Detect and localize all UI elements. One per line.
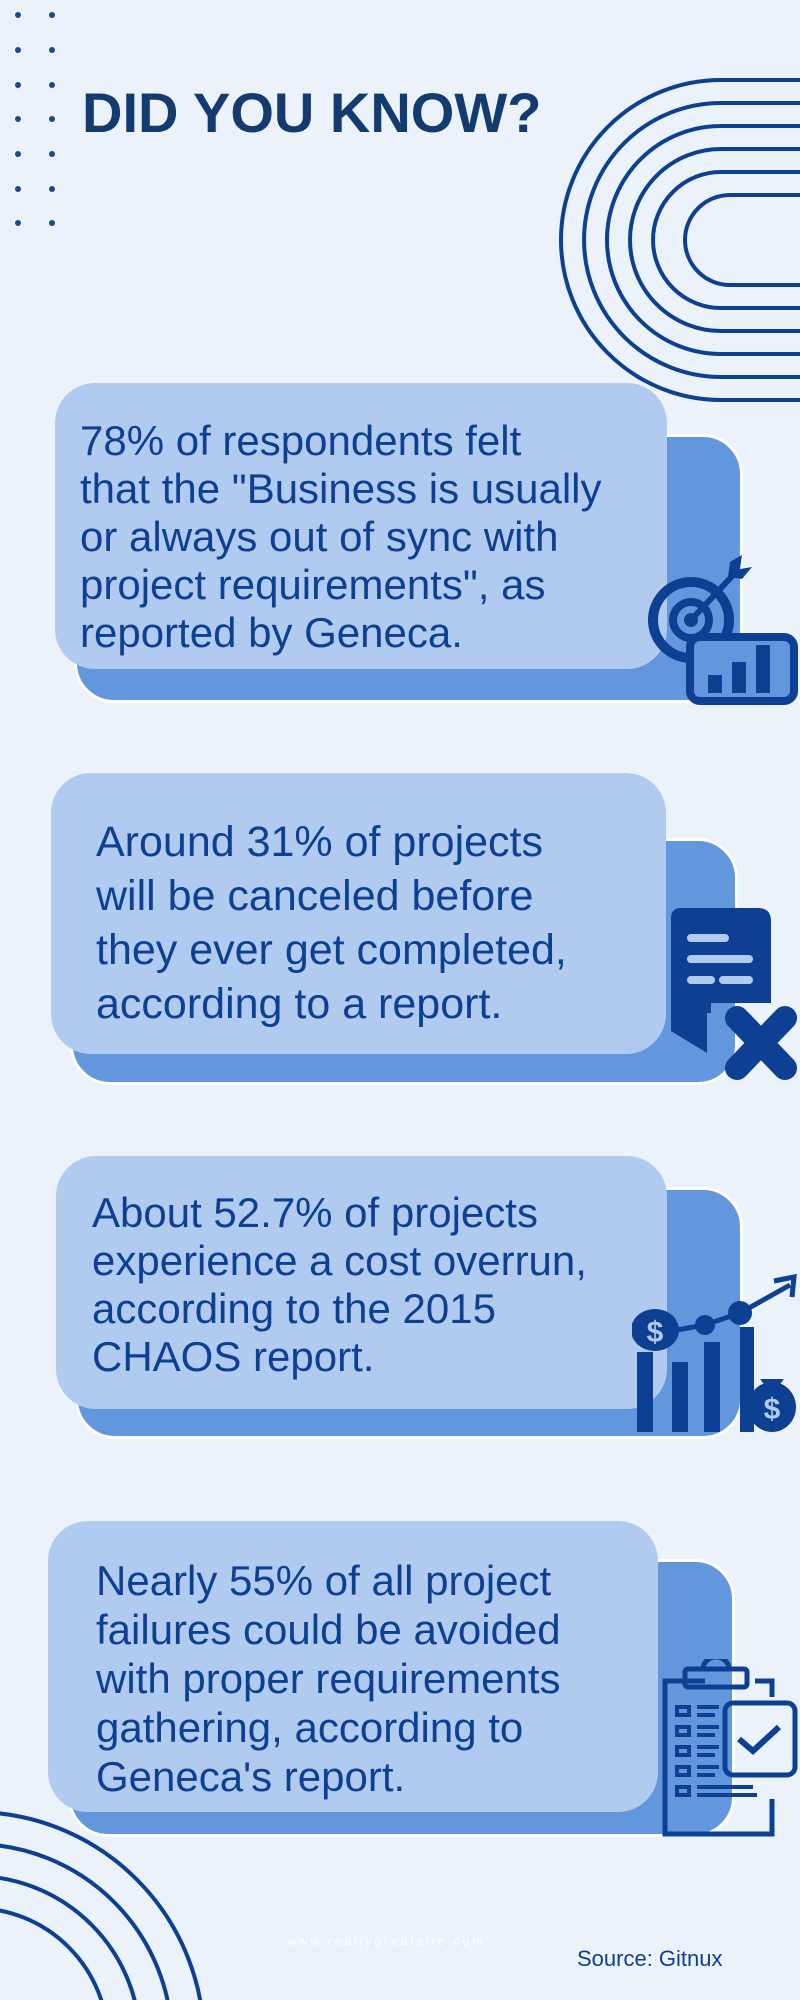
text: 52.7% statistic: according to the 2015 [92, 1285, 496, 1332]
title: DID YOU KNOW? [82, 81, 541, 144]
panel: card 1 [55, 383, 798, 705]
icon: cost chart with money: $ [647, 1316, 664, 1349]
text: 31% statistic: Around 31% of projects [96, 818, 543, 866]
text: 52.7% statistic: CHAOS report. [92, 1333, 374, 1380]
text: 78% statistic: that the "Business is usually [80, 465, 602, 512]
decorative dots [15, 12, 55, 226]
text: 55% statistic: gathering, according to [96, 1704, 523, 1751]
footer source: Source: Gitnux [577, 1946, 723, 1971]
text: 78% statistic [80, 417, 602, 656]
text: 78% statistic: 78% of respondents felt [80, 417, 521, 464]
text: 55% statistic: with proper requirements [96, 1655, 561, 1702]
text: 78% statistic: reported by Geneca. [80, 609, 463, 656]
text: 31% statistic: according to a report. [96, 980, 502, 1028]
text: 31% statistic: will be canceled before [96, 872, 533, 920]
text: 78% statistic: project requirements", as [80, 561, 545, 608]
text: 31% statistic [96, 818, 567, 1028]
icon: document with cross [671, 908, 797, 1080]
decorative arcs top right [559, 78, 800, 402]
text: 31% statistic: they ever get completed, [96, 926, 567, 974]
panel: card 3 [56, 1156, 797, 1439]
icon: clipboard checklist [662, 1659, 798, 1836]
icon: target and bar chart [648, 555, 798, 705]
text: 52.7% statistic: experience a cost overrun, [92, 1237, 587, 1284]
icon: cost chart with money: $ [764, 1393, 781, 1426]
text: 55% statistic: Nearly 55% of all project [96, 1557, 551, 1604]
text: 55% statistic [96, 1557, 561, 1800]
text: 52.7% statistic [92, 1189, 587, 1380]
panel: card 4 [48, 1521, 798, 1837]
text: 52.7% statistic: About 52.7% of projects [92, 1189, 538, 1236]
icon: cost chart with money [632, 1274, 797, 1432]
text: 55% statistic: Geneca's report. [96, 1753, 405, 1800]
text: 78% statistic: or always out of sync with [80, 513, 559, 560]
panel: card 2 [51, 773, 797, 1085]
text: 55% statistic: failures could be avoided [96, 1606, 561, 1653]
decorative arcs bottom left [0, 1811, 202, 2000]
footer website: www.reallygreatsite.com [287, 1934, 485, 1948]
